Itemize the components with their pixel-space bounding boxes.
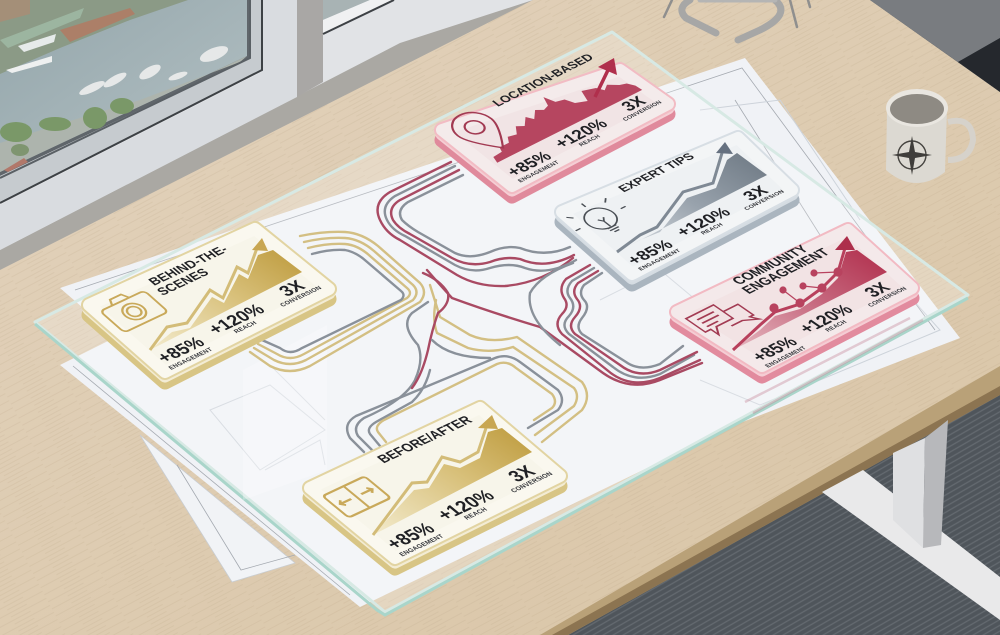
stat conversion [264, 272, 324, 308]
card title: ENGAGEMENT [738, 246, 834, 296]
stat reach: REACH [578, 134, 602, 148]
stat reach: +120% [432, 487, 500, 525]
stat reach: REACH [824, 319, 849, 333]
connector wires: location to expert tips [378, 162, 576, 286]
icon: camera [95, 286, 168, 333]
stat engagement: +85% [623, 237, 677, 268]
card title: BEFORE/AFTER [374, 413, 476, 466]
window: harbour view [0, 0, 250, 176]
chart line and arrow [733, 236, 855, 350]
stat conversion: CONVERSION [279, 285, 324, 308]
stat conversion: CONVERSION [622, 100, 664, 122]
window wall and sill [0, 0, 540, 280]
icon: light bulb [557, 191, 641, 243]
stat engagement: ENGAGEMENT [764, 345, 808, 369]
window frame lines [0, 0, 262, 203]
network nodes [770, 268, 842, 312]
icon: map pin [443, 107, 518, 157]
card: behind-the-scenes [89, 227, 332, 382]
second window pane [323, 0, 394, 34]
card: community engagement [670, 230, 917, 376]
stat engagement: +85% [747, 333, 802, 365]
icon: chat bubbles [686, 298, 759, 340]
coffee mug [886, 89, 973, 183]
stat reach: REACH [233, 320, 259, 335]
stat conversion [729, 178, 786, 212]
stat conversion: CONVERSION [866, 286, 909, 308]
card: expert tips [555, 137, 793, 284]
stat reach: REACH [700, 223, 725, 236]
chart arrow [595, 58, 617, 97]
line chart area [373, 428, 532, 535]
icon: before/after arrows [323, 476, 391, 518]
stat conversion: CONVERSION [744, 189, 786, 212]
stat engagement: ENGAGEMENT [638, 248, 683, 272]
floor corner at top right [870, 0, 1000, 92]
blueprint sheets [60, 58, 960, 607]
card title: COMMUNITY [728, 243, 812, 287]
stat conversion [494, 458, 555, 494]
stat conversion: 3X [739, 183, 773, 204]
stat engagement: +85% [502, 148, 556, 180]
stat conversion: 3X [859, 279, 895, 300]
skyline chart [465, 64, 642, 163]
stat reach: +120% [550, 116, 612, 151]
desk leg and base [822, 420, 1000, 620]
stat engagement: ENGAGEMENT [517, 160, 561, 184]
stat reach: REACH [463, 507, 489, 521]
card title: SCENES [153, 265, 212, 298]
connector wires: expert tips to community [427, 263, 702, 385]
stat conversion: 3X [617, 93, 651, 114]
line chart area [617, 153, 767, 252]
chart line and arrow [373, 415, 498, 535]
stat reach: +120% [203, 301, 269, 338]
stat conversion [608, 88, 664, 122]
stat engagement: +85% [152, 333, 209, 366]
connector wires: before/after loop [347, 273, 587, 452]
card: before/after [310, 408, 564, 568]
line chart area [733, 250, 887, 350]
chart line and arrow [617, 142, 733, 252]
stat conversion: 3X [504, 462, 541, 486]
line chart area [150, 250, 302, 350]
stat reach: +120% [672, 204, 735, 240]
stat conversion: 3X [274, 277, 309, 300]
chart line and arrow [150, 238, 268, 350]
card title: EXPERT TIPS [615, 151, 698, 194]
stat engagement: ENGAGEMENT [398, 533, 446, 558]
crab ornament [664, 0, 810, 40]
stat conversion [850, 274, 909, 308]
card title: LOCATION-BASED [489, 51, 597, 109]
connector wires: behind-the-scenes loop [250, 232, 424, 371]
card: location-based [442, 47, 670, 196]
stat engagement: +85% [382, 520, 440, 553]
stat engagement: ENGAGEMENT [167, 347, 215, 371]
card title: BEHIND-THE- [145, 243, 231, 288]
stat reach: +120% [794, 301, 858, 336]
stat conversion: CONVERSION [510, 471, 555, 494]
